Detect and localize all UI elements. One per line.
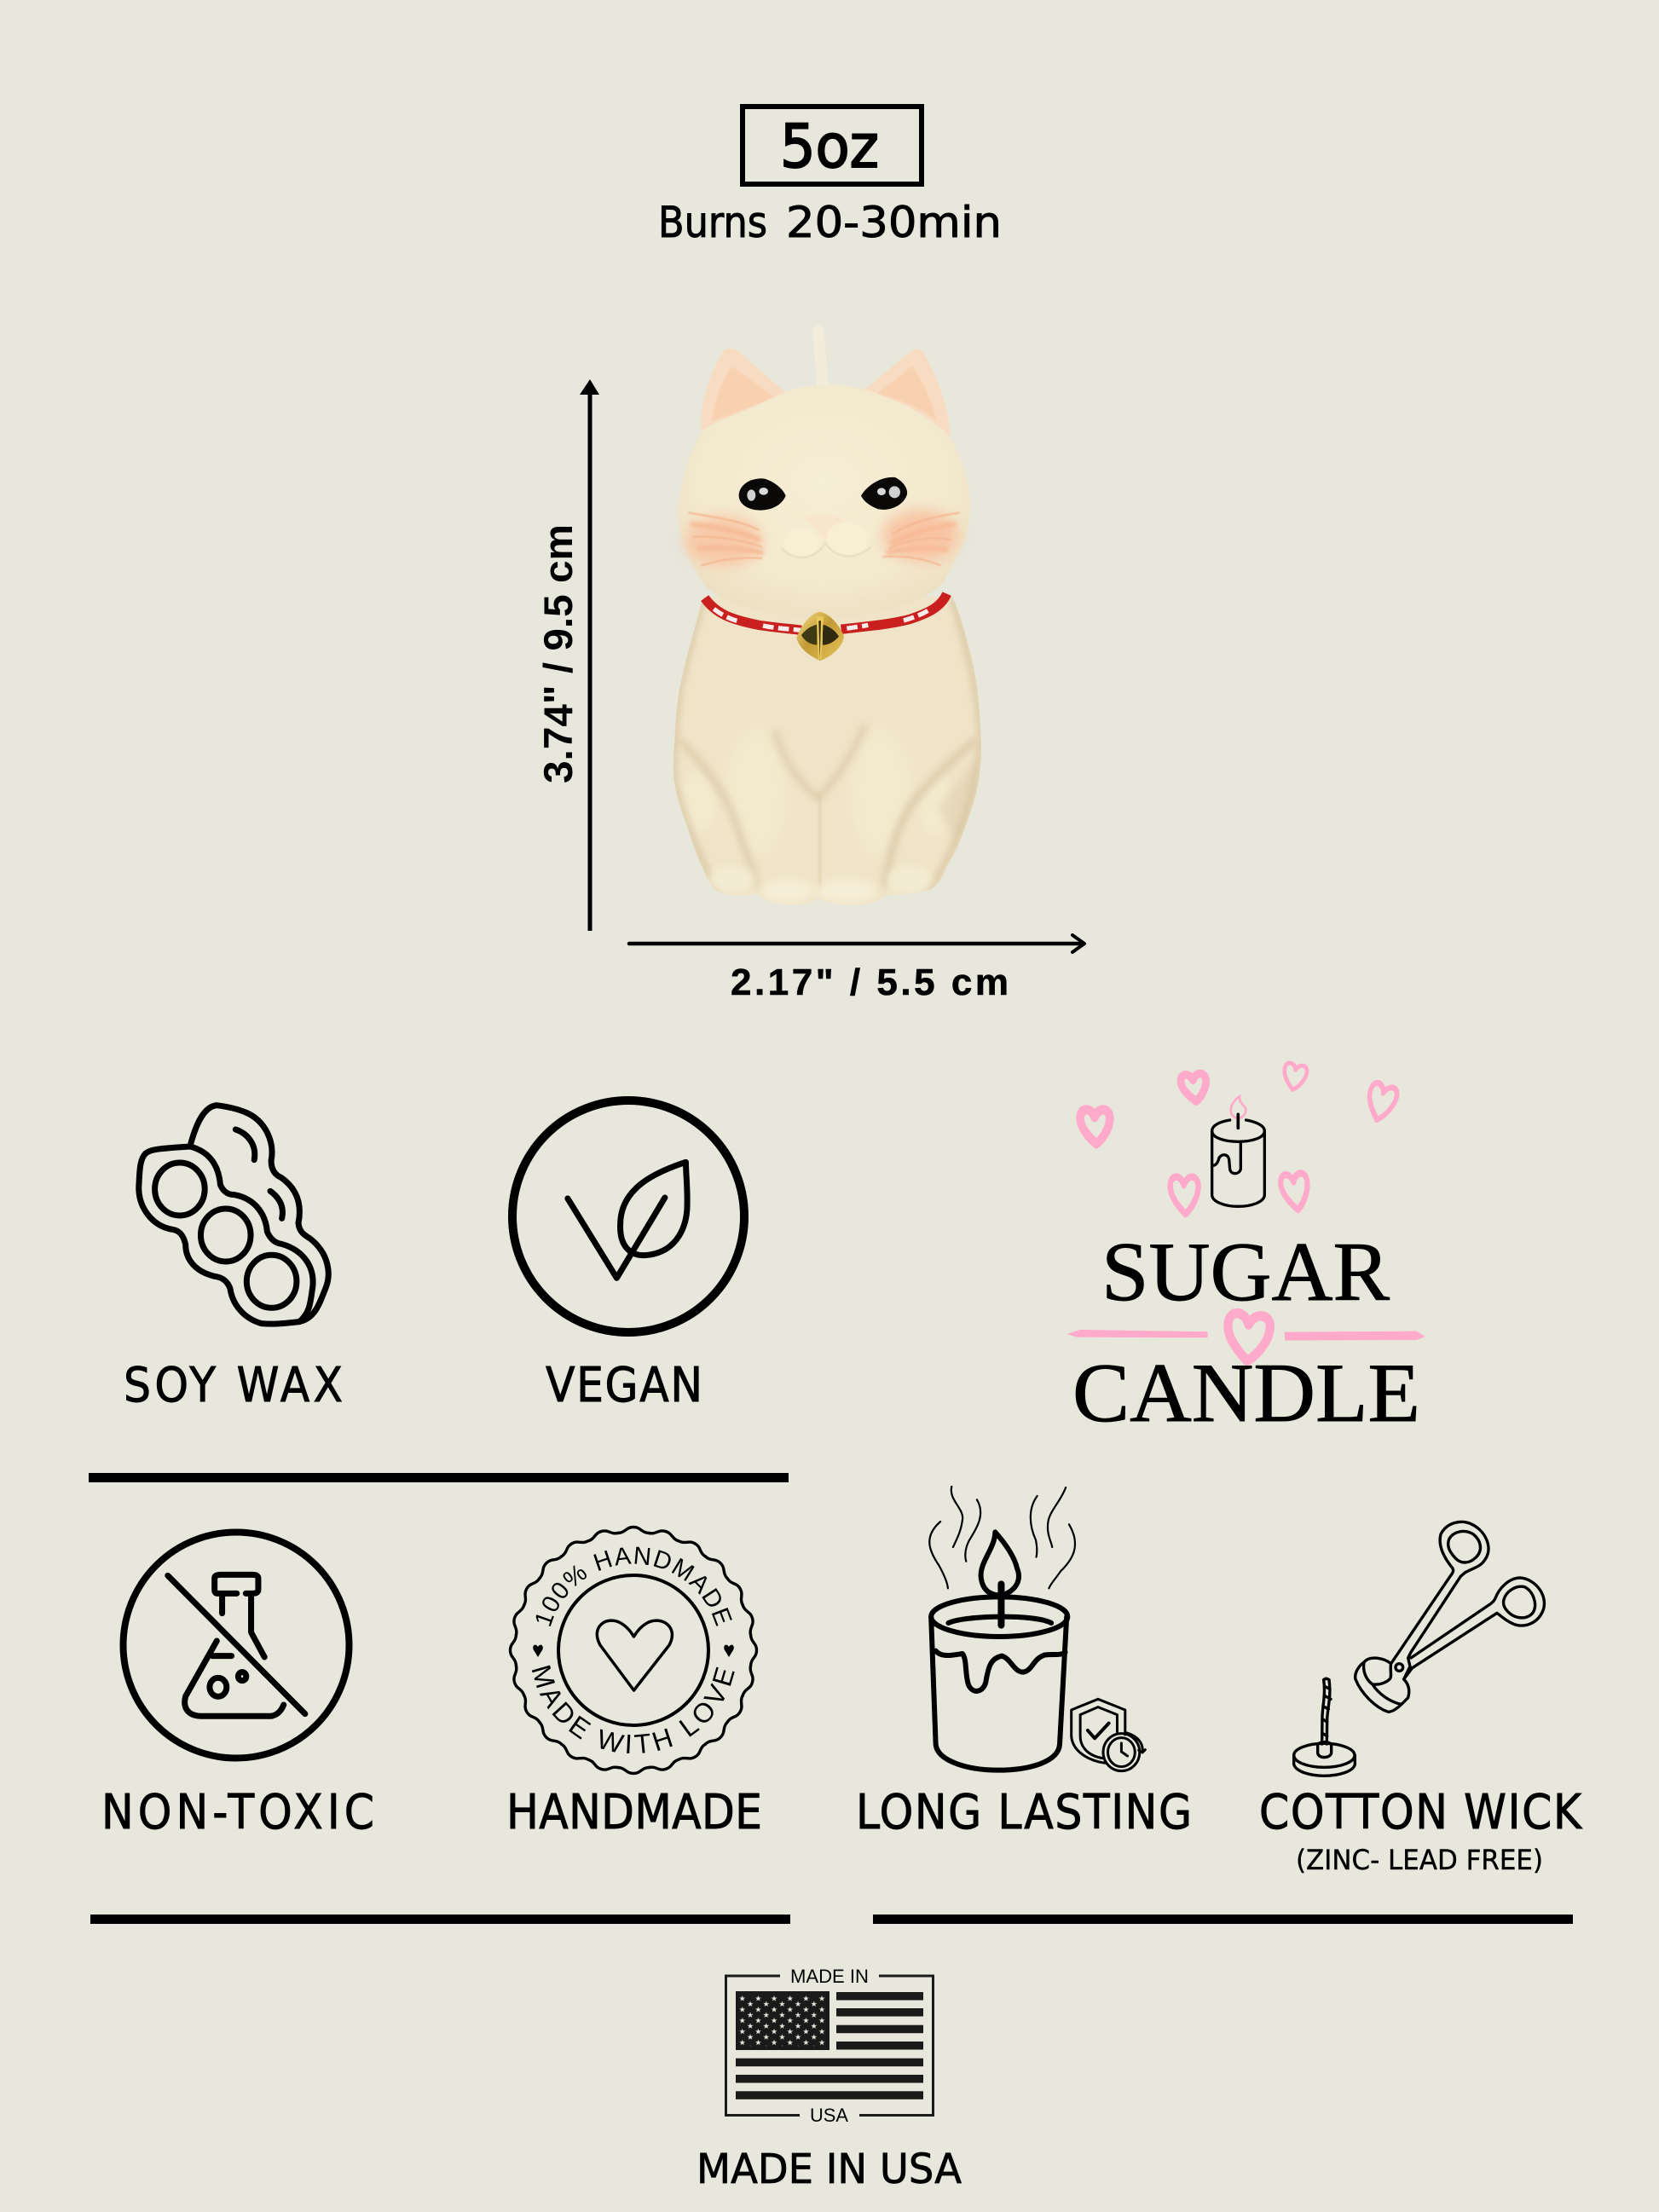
divider: lower right — [873, 1915, 1573, 1924]
cat candle photo — [673, 326, 981, 905]
leg creases — [682, 727, 974, 887]
paws — [708, 869, 755, 892]
label: soy wax: SOY WAX — [124, 1358, 343, 1413]
size box: 5oz — [743, 107, 922, 184]
label: vegan: VEGAN — [546, 1358, 702, 1413]
head — [678, 384, 970, 618]
label: long lasting: LONG LASTING — [856, 1785, 1192, 1840]
icon: handmade seal: MADE WITH LOVE — [532, 1666, 735, 1753]
width label: 2.17" / 5.5 cm — [731, 962, 1009, 1003]
icon: handmade seal: 100% HANDMADE — [535, 1546, 732, 1626]
edge shading — [673, 597, 981, 892]
icon: soy wax — [139, 1106, 328, 1324]
body highlights — [725, 727, 787, 858]
muzzle — [804, 514, 850, 543]
pink divider lines — [1067, 1330, 1208, 1337]
height arrow — [580, 379, 599, 931]
icon: made in usa flag — [726, 1966, 933, 2126]
burn time text: 20-30min — [786, 198, 1002, 247]
sublabel: zinc lead free: (ZINC- LEAD FREE) — [1296, 1844, 1543, 1876]
candle — [1212, 1114, 1264, 1206]
bell — [796, 612, 844, 661]
icon: long lasting candle — [929, 1487, 1145, 1771]
divider: lower left — [90, 1915, 790, 1924]
icon: non-toxic — [123, 1533, 350, 1758]
icon: vegan — [512, 1100, 744, 1332]
label: non-toxic: NON-TOXIC — [101, 1785, 374, 1840]
wick — [812, 326, 835, 388]
ears and head — [701, 349, 951, 436]
wordmark: SUGAR — [1101, 1226, 1390, 1319]
label: handmade: HANDMADE — [506, 1785, 762, 1840]
divider: upper left — [89, 1473, 789, 1482]
whisker bands — [692, 524, 955, 552]
icon: made in usa flag: USA — [810, 2105, 848, 2126]
hearts — [1080, 1062, 1399, 1363]
flame — [1231, 1096, 1246, 1118]
logo: sugar candle: CANDLE — [1072, 1347, 1420, 1440]
icon: made in usa flag: MADE IN — [790, 1966, 869, 1987]
size box: 5oz: 5oz — [780, 112, 879, 182]
logo: sugar candle — [1067, 1062, 1425, 1440]
label: made in usa: MADE IN USA — [697, 2146, 962, 2193]
whiskers — [689, 513, 959, 565]
collar — [705, 594, 947, 630]
icon: wick trimmer and cotton wick — [1294, 1522, 1544, 1776]
width arrow — [629, 935, 1084, 952]
blush — [685, 516, 761, 567]
height label: 3.74" / 9.5 cm — [535, 524, 581, 783]
body — [673, 597, 981, 905]
burn time text: Burns — [658, 198, 767, 247]
icon: handmade seal — [508, 1526, 759, 1775]
label: cotton wick: COTTON WICK — [1259, 1785, 1583, 1840]
burn time text — [658, 198, 1002, 247]
eyes — [739, 478, 786, 511]
